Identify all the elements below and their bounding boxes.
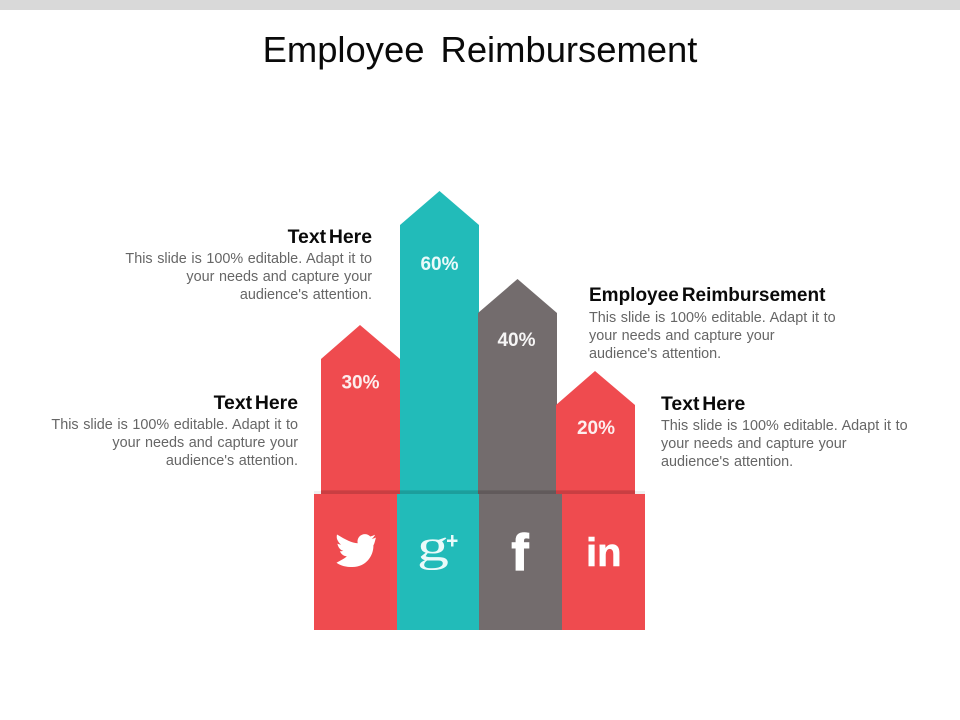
text block: lower left: Text Here [214, 392, 298, 414]
text block: upper right: Employee Reimbursement [589, 285, 825, 306]
arrow bar: 30% [321, 325, 400, 494]
base block: linkedin [562, 494, 645, 630]
arrow bar: 20%: 20% [577, 418, 615, 439]
text block: lower right: This slide is 100% editable. Adapt it to [661, 418, 908, 434]
top band [0, 0, 960, 10]
text block: upper left: audience's attention. [240, 287, 372, 303]
base block: facebook [479, 494, 562, 630]
icon: f: f [512, 524, 530, 581]
text block: lower right: audience's attention. [661, 454, 793, 470]
text block: upper left: This slide is 100% editable. Adapt it to [125, 251, 372, 267]
text block: upper left: Text Here [288, 226, 372, 248]
text block: lower right: Text Here [661, 393, 745, 415]
text block: upper left [125, 226, 372, 303]
icon: plus [447, 535, 458, 546]
arrow bar: 40%: 40% [497, 330, 536, 351]
text block: lower left: your needs and capture your [112, 435, 298, 451]
text block: lower left [51, 392, 298, 469]
text block: lower left: This slide is 100% editable. Adapt it to [51, 417, 298, 433]
text block: upper right [589, 285, 836, 362]
arrow bar: 30%: 30% [341, 372, 380, 394]
base block: google plus [397, 494, 479, 630]
base block: twitter [314, 494, 397, 630]
text block: upper right: your needs and capture your [589, 328, 775, 344]
base shadow [314, 490, 645, 494]
text block: upper left: your needs and capture your [186, 269, 372, 285]
text block: lower left: audience's attention. [166, 453, 298, 469]
text block: upper right: audience's attention. [589, 346, 721, 362]
arrow bar: 60% [400, 191, 479, 494]
icon: g+: g [417, 521, 449, 570]
text block: upper right: This slide is 100% editable. Adapt it to [589, 310, 836, 326]
icon: in: in [586, 531, 622, 575]
icon: twitter bird [336, 534, 376, 567]
text block: lower right: your needs and capture your [661, 436, 847, 452]
title: Employee Reimbursement [263, 29, 697, 70]
arrow bar: 60%: 60% [420, 254, 459, 275]
text block: lower right [661, 393, 908, 470]
arrow bar: 40% [478, 279, 557, 494]
arrow bar: 20% [556, 371, 635, 494]
